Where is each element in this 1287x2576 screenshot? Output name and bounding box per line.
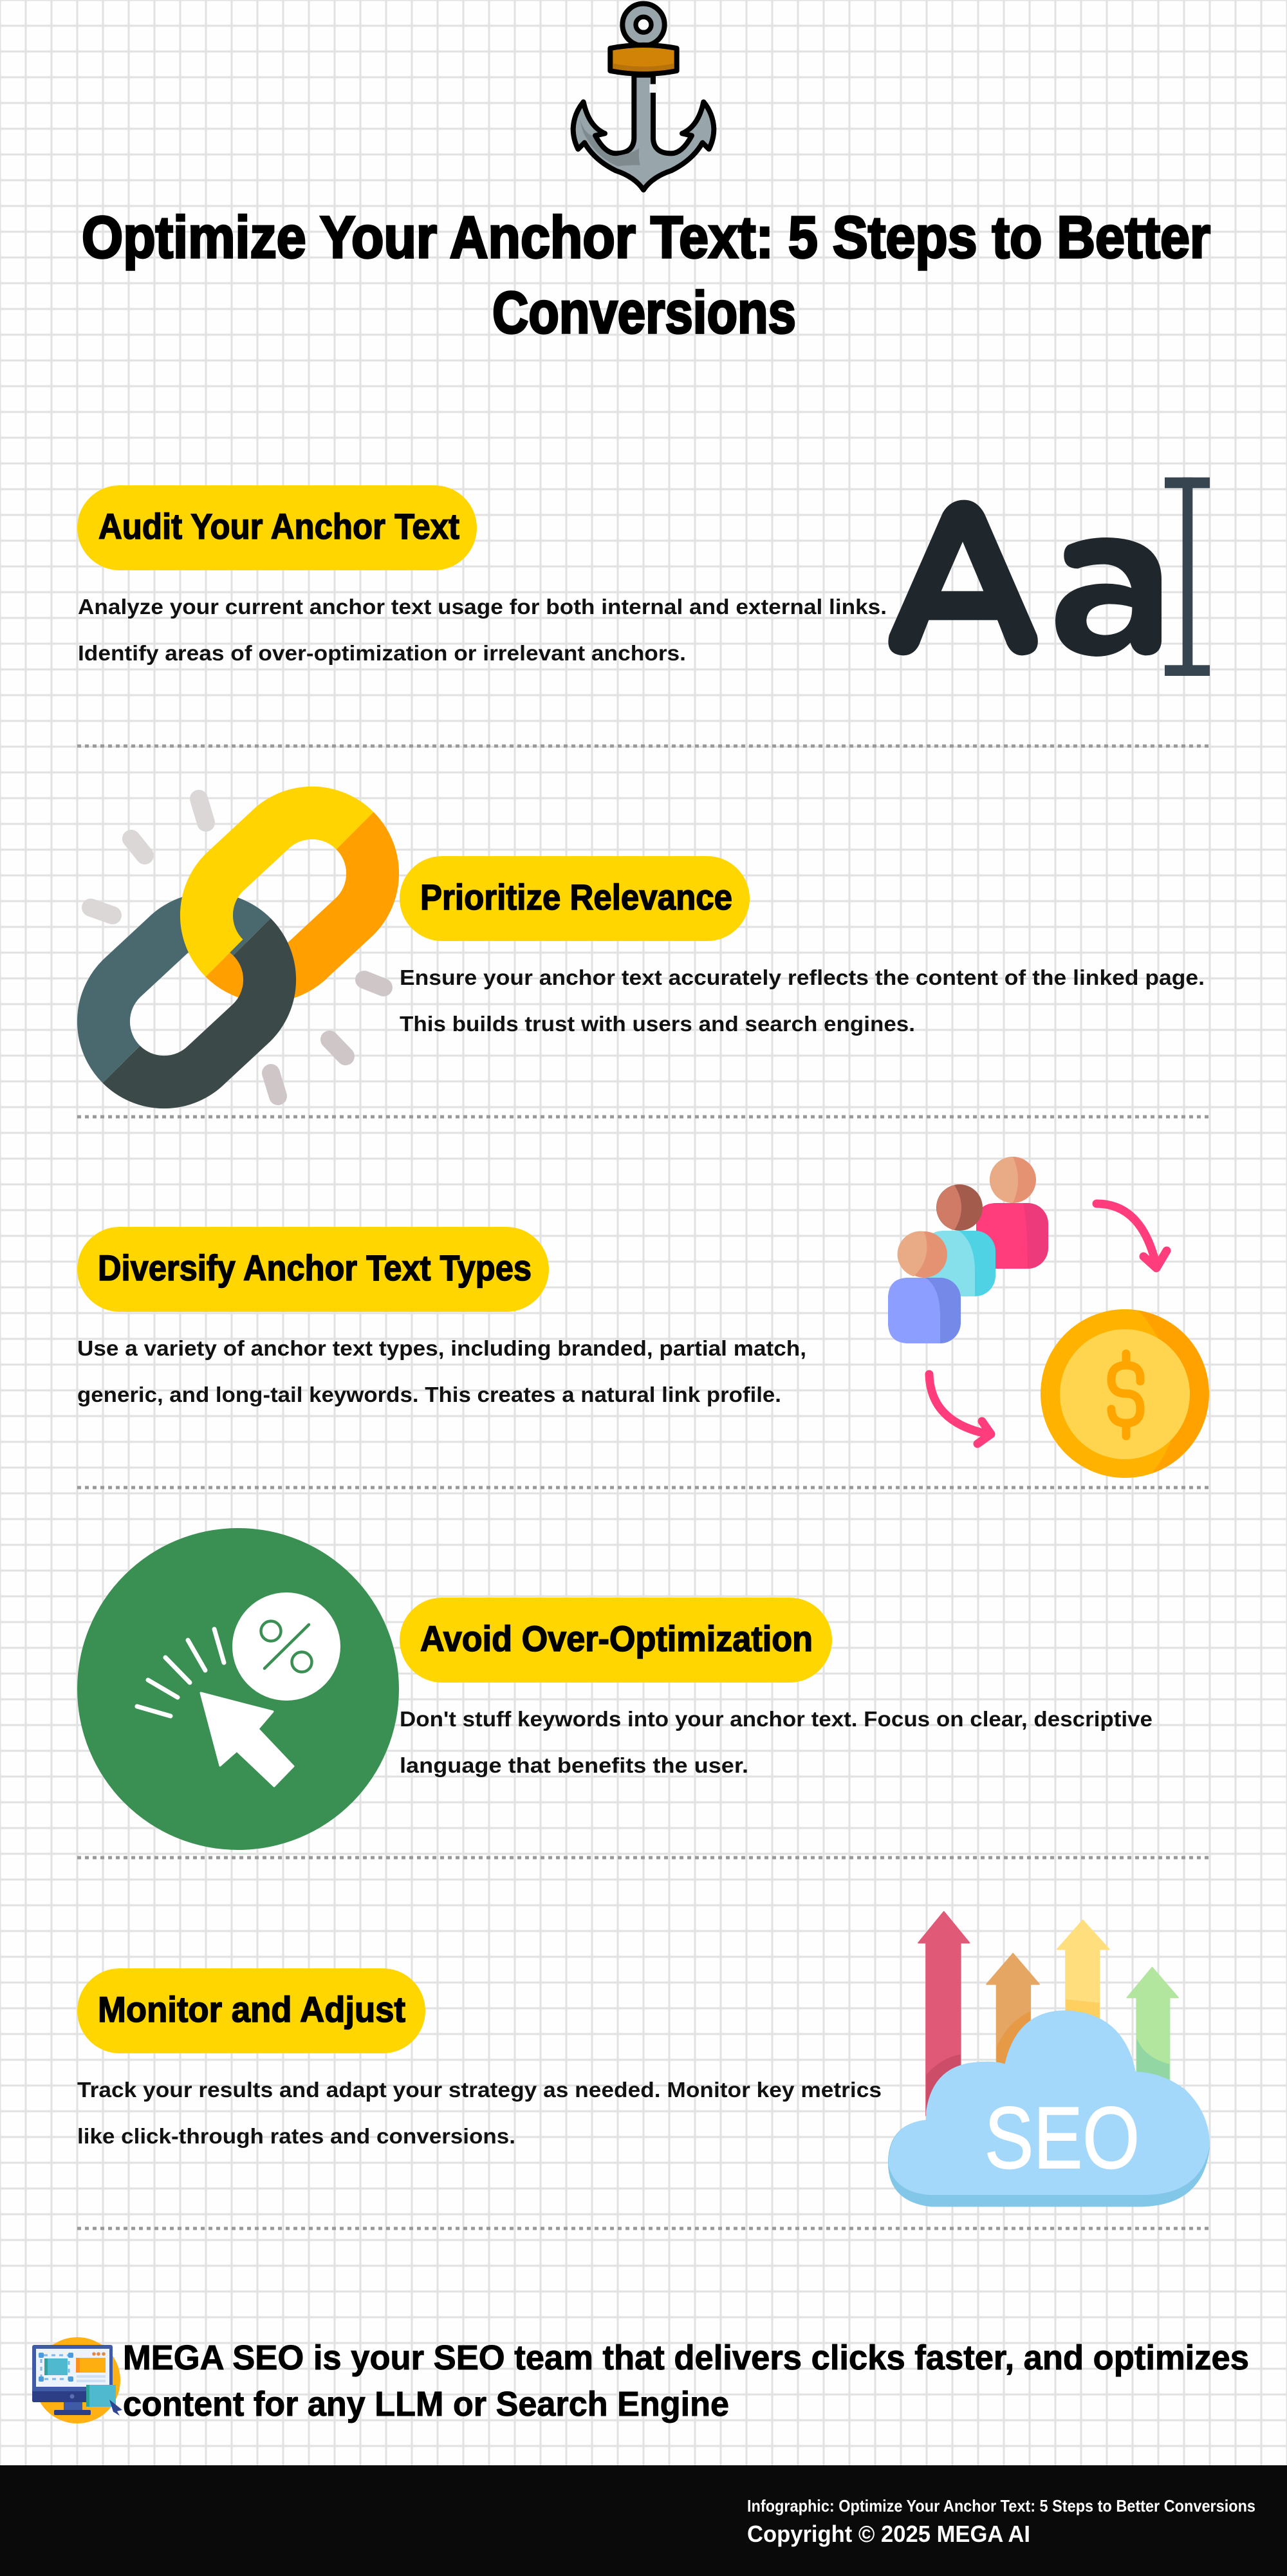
footer bar: Copyright © 2025 MEGA AI <box>747 2521 1030 2547</box>
heading pill: monitor <box>77 1968 425 2053</box>
heading pill: over-optimization: Avoid Over-Optimization <box>420 1618 813 1659</box>
callout: MEGA SEO message <box>123 2338 1249 2423</box>
icon: monitor design <box>32 2337 122 2423</box>
panel: step 2 relevance <box>91 799 1205 1096</box>
text block: audit description <box>78 595 887 665</box>
icon: chain link <box>91 799 384 1096</box>
divider <box>77 1856 1210 1859</box>
text block: diversify description: Use a variety of anchor text types, including branded, partial match, <box>77 1336 806 1360</box>
text block: over-optimization description: Don't stuff keywords into your anchor text. Focus on clear, descriptive <box>400 1707 1153 1731</box>
title <box>82 205 1210 346</box>
heading pill: diversify: Diversify Anchor Text Types <box>98 1247 532 1288</box>
text block: diversify description <box>77 1336 806 1406</box>
icon: anchor <box>573 4 714 190</box>
heading pill: relevance <box>400 856 750 941</box>
panel: step 3 diversify <box>77 1157 1209 1478</box>
text block: monitor description: like click-through rates and conversions. <box>77 2124 515 2148</box>
text block: relevance description: Ensure your anchor text accurately reflects the content of the linked page. <box>400 966 1205 989</box>
text block: audit description: Identify areas of over-optimization or irrelevant anchors. <box>78 641 686 665</box>
divider <box>77 1115 1210 1119</box>
icon: click cursor percent <box>77 1528 399 1850</box>
panel: step 4 over-optimization <box>77 1528 1153 1850</box>
footer bar <box>0 2465 1287 2576</box>
text block: relevance description: This builds trust with users and search engines. <box>400 1012 915 1036</box>
icon: Aa text cursor <box>888 478 1210 676</box>
heading pill: diversify <box>77 1227 549 1312</box>
icon: SEO cloud with arrows <box>888 1912 1210 2207</box>
heading pill: monitor: Monitor and Adjust <box>98 1989 405 2030</box>
divider <box>77 744 1210 748</box>
text block: audit description: Analyze your current anchor text usage for both internal and external links. <box>78 595 887 619</box>
panel: step 1 audit <box>77 478 1210 676</box>
divider <box>77 2227 1210 2230</box>
text block: over-optimization description: language that benefits the user. <box>400 1753 748 1777</box>
callout: MEGA SEO message: MEGA SEO is your SEO team that delivers clicks faster, and optimizes <box>123 2338 1249 2377</box>
text block: over-optimization description <box>400 1707 1153 1777</box>
text block: monitor description <box>77 2078 882 2148</box>
text block: diversify description: generic, and long-tail keywords. This creates a natural link profile. <box>77 1383 781 1406</box>
heading pill: relevance: Prioritize Relevance <box>420 877 732 917</box>
divider <box>77 1486 1210 1489</box>
text block: relevance description <box>400 966 1205 1036</box>
heading pill: audit: Audit Your Anchor Text <box>98 506 459 546</box>
icon: SEO cloud with arrows: SEO <box>985 2089 1140 2187</box>
panel: step 5 monitor <box>77 1912 1210 2207</box>
heading pill: over-optimization <box>400 1598 832 1683</box>
text block: monitor description: Track your results and adapt your strategy as needed. Monitor key metrics <box>77 2078 882 2102</box>
callout: MEGA SEO message: content for any LLM or Search Engine <box>123 2385 729 2423</box>
title: Conversions <box>492 280 796 346</box>
heading pill: audit <box>77 485 477 570</box>
icon: people to coin <box>888 1157 1209 1478</box>
